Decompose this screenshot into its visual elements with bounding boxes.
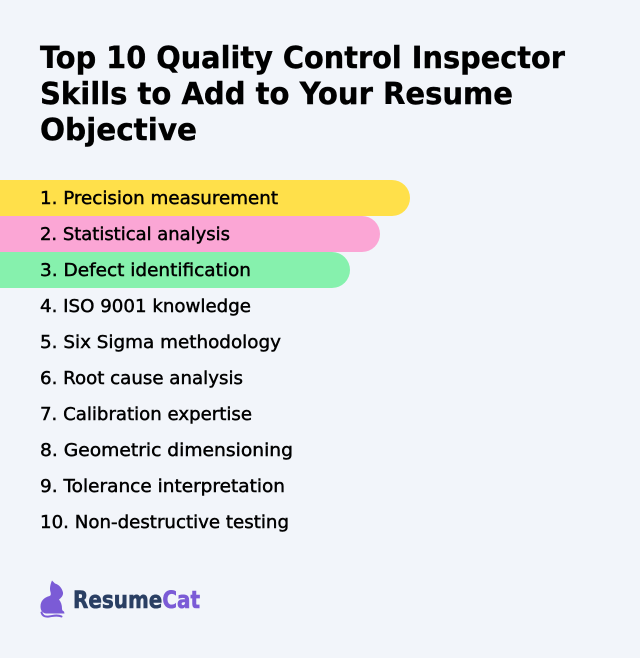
skills list (0, 180, 410, 533)
skill 3 bar (0, 252, 350, 288)
skill 7: 7. Calibration expertise (40, 405, 252, 425)
icon: cat tail (42, 612, 62, 617)
skill 2: 2. Statistical analysis (40, 225, 230, 245)
skill 8: 8. Geometric dimensioning (40, 441, 293, 461)
title: Top 10 Quality Control Inspector (40, 41, 565, 76)
skill 3: 3. Defect identification (40, 261, 251, 281)
title: Skills to Add to Your Resume (40, 77, 513, 112)
skill 6: 6. Root cause analysis (40, 369, 243, 389)
wordmark: ResumeCat (73, 586, 200, 614)
skill 1 bar (0, 180, 410, 216)
logo: ResumeCat (40, 580, 200, 617)
skill 9: 9. Tolerance interpretation (40, 477, 285, 497)
title: Objective (40, 113, 197, 148)
icon: cat (40, 580, 64, 614)
title (40, 41, 565, 148)
skill 5: 5. Six Sigma methodology (40, 333, 281, 353)
skill 4: 4. ISO 9001 knowledge (40, 297, 251, 317)
skill 2 bar (0, 216, 380, 252)
skill 10: 10. Non-destructive testing (40, 513, 289, 533)
skill 1: 1. Precision measurement (40, 189, 278, 209)
